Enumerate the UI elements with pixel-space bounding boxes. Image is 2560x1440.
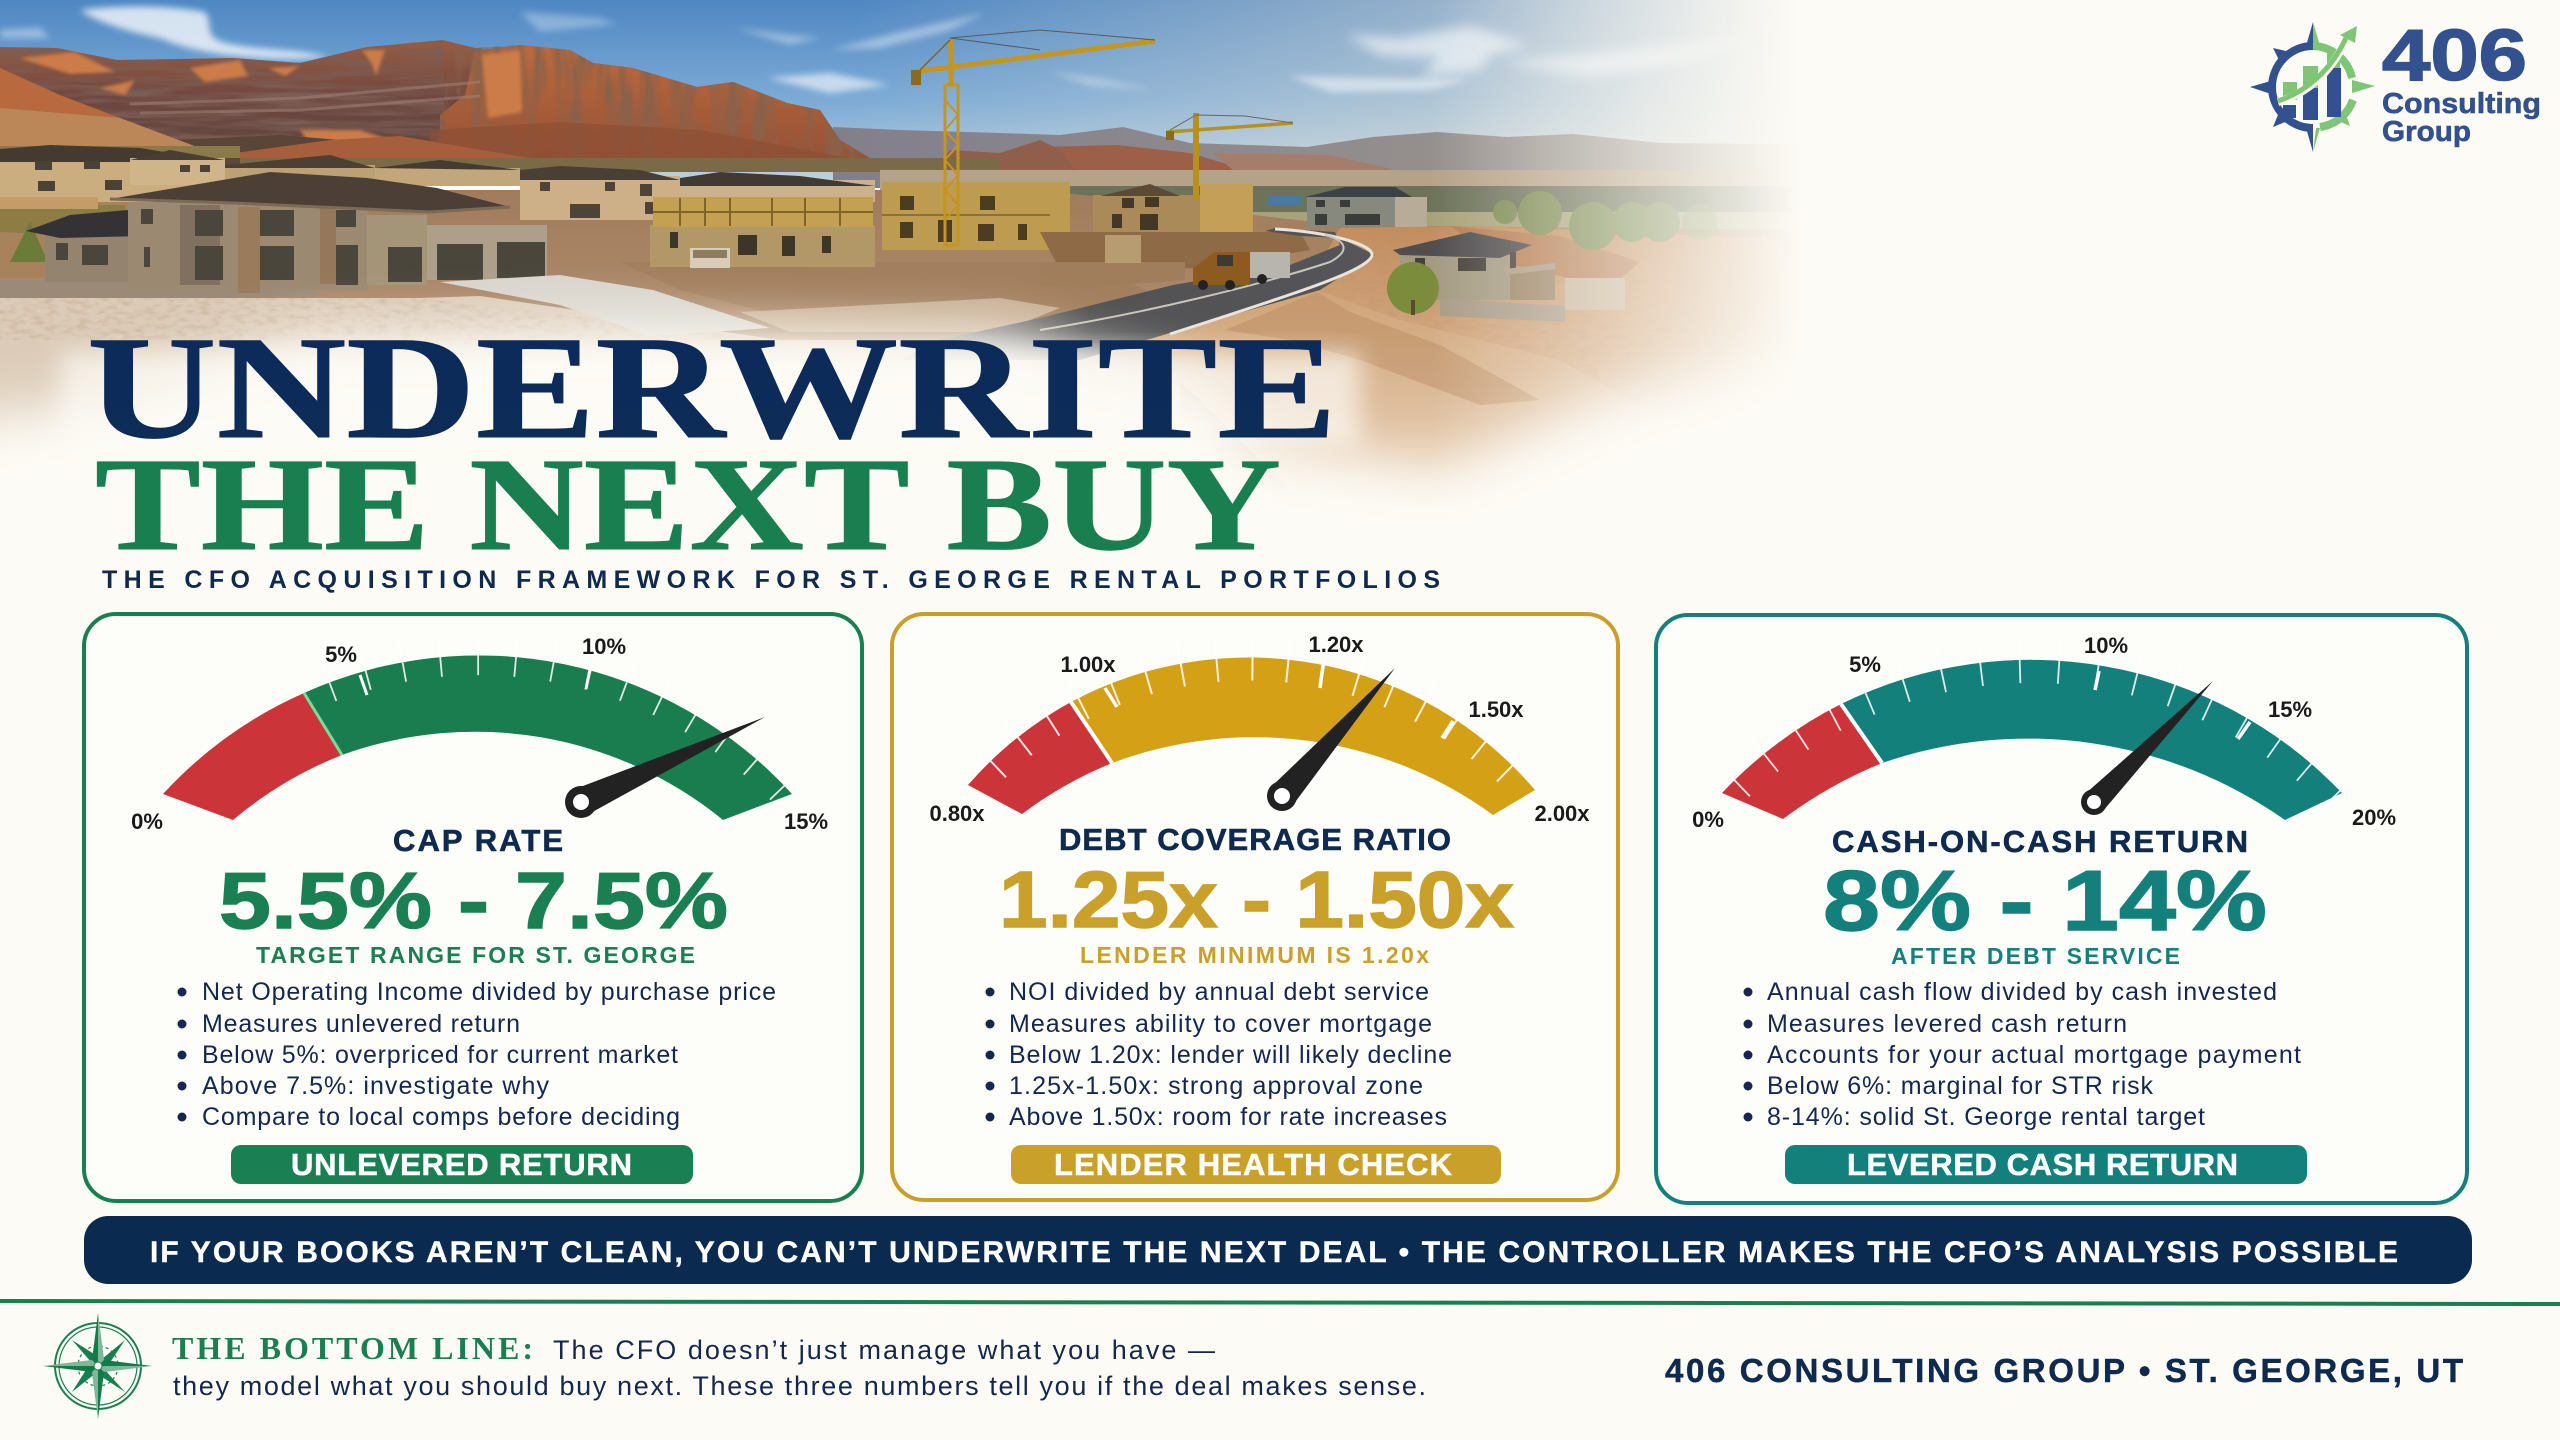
gauge red zone: [968, 702, 1112, 814]
right dirt field: [1318, 226, 1712, 396]
gauge needle: [565, 717, 765, 818]
bullet list: Accounts for your actual mortgage payment: [1767, 1041, 2301, 1069]
gauge: debt coverage: [929, 632, 1590, 826]
scale labels: 0.80x: [929, 801, 985, 826]
bottom line text 1: The CFO doesn’t just manage what you have —: [553, 1335, 1215, 1365]
title line 2: THE NEXT BUY: [95, 430, 1281, 578]
bullet list: [178, 978, 776, 1131]
scale labels: 1.50x: [1468, 697, 1524, 722]
bullet list: 8-14%: solid St. George rental target: [1767, 1103, 2205, 1131]
footer: [43, 1313, 2463, 1419]
scale labels: 10%: [582, 634, 626, 659]
callout banner: IF YOUR BOOKS AREN’T CLEAN, YOU CAN’T UNDERWRITE THE NEXT DEAL • THE CONTROLLER MAKES THE CFO’S ANALYSIS POSSIBLE: [150, 1236, 2398, 1269]
gauge teal zone: [1841, 660, 2342, 820]
bullet list: Below 1.20x: lender will likely decline: [1009, 1041, 1452, 1069]
company and location: 406 CONSULTING GROUP • ST. GEORGE, UT: [1665, 1352, 2463, 1389]
hero photo: desert construction scene: [0, 0, 1781, 494]
distant ranges: [833, 127, 1850, 188]
gauge red zone: [1722, 704, 1882, 819]
scale labels: 5%: [1849, 652, 1881, 677]
bullet list: 1.25x-1.50x: strong approval zone: [1009, 1072, 1423, 1100]
bullet list: Above 1.50x: room for rate increases: [1009, 1103, 1447, 1131]
bottom line label: THE BOTTOM LINE:: [172, 1330, 533, 1366]
gauge gold zone: [1071, 657, 1535, 815]
ground base: [216, 190, 1687, 480]
framed house C: [1093, 184, 1253, 233]
scale labels: 1.20x: [1308, 632, 1364, 657]
back row houses center: [520, 166, 875, 220]
metric name: DEBT COVERAGE RATIO: [1059, 822, 1451, 857]
gauge: cap rate: [131, 634, 828, 834]
panel: cash-on-cash return: [1656, 615, 2467, 1203]
logo: 406 Consulting Group: [2250, 16, 2541, 152]
badge: LENDER HEALTH CHECK: [1054, 1147, 1453, 1182]
tower crane 2: [1167, 113, 1293, 200]
logo text Consulting: Consulting: [2382, 88, 2541, 120]
small tree left: [10, 222, 48, 262]
logo compass icon: [2250, 22, 2375, 152]
scale labels: [929, 632, 1590, 826]
gauge green zone: [304, 655, 792, 820]
crane 1 counterweight: [911, 70, 921, 85]
scale labels: 15%: [2268, 697, 2312, 722]
framed house A: [650, 197, 875, 268]
scale labels: 0%: [1692, 807, 1724, 832]
scale labels: 5%: [325, 642, 357, 667]
metric name: CASH-ON-CASH RETURN: [1832, 824, 2248, 859]
bullet list: Measures unlevered return: [202, 1010, 520, 1038]
scale labels: 1.00x: [1060, 652, 1116, 677]
badge: LEVERED CASH RETURN: [1847, 1147, 2238, 1182]
bullet list: Below 5%: overpriced for current market: [202, 1041, 678, 1069]
title line 1: UNDERWRITE: [87, 306, 1337, 469]
gauge needle: [2081, 681, 2213, 815]
scale labels: 20%: [2352, 805, 2396, 830]
bullet list: Annual cash flow divided by cash invested: [1767, 978, 2277, 1006]
bullet list: Compare to local comps before deciding: [202, 1103, 680, 1131]
badge: [1785, 1145, 2307, 1184]
card frame: [84, 614, 862, 1201]
halo behind title: [60, 352, 1360, 447]
low block walls and dirt: [1040, 232, 1310, 270]
bullet list: Measures ability to cover mortgage: [1009, 1010, 1432, 1038]
construction ground: [646, 274, 1148, 320]
scale labels: 2.00x: [1534, 801, 1590, 826]
bullet list: Net Operating Income divided by purchase price: [202, 978, 776, 1006]
dune: [1140, 295, 1565, 474]
scale labels: 10%: [2084, 633, 2128, 658]
scale labels: [1692, 633, 2396, 832]
bullet list: Below 6%: marginal for STR risk: [1767, 1072, 2154, 1100]
road: [900, 228, 1375, 360]
bullet list: Above 7.5%: investigate why: [202, 1072, 550, 1100]
badge: [231, 1145, 693, 1184]
right house: [1387, 232, 1625, 322]
logo text 406: 406: [2382, 16, 2527, 96]
callout banner: [84, 1216, 2472, 1284]
foreground left hill: [0, 68, 194, 146]
scale labels: 15%: [784, 809, 828, 834]
framed house B: [882, 182, 1070, 250]
main mesa: [0, 40, 870, 165]
bullet list: NOI divided by annual debt service: [1009, 978, 1429, 1006]
crane 2 counterweight: [1166, 131, 1174, 140]
target value: 8% - 14%: [1823, 854, 2267, 949]
scale labels: [131, 634, 828, 834]
target value: 5.5% - 7.5%: [219, 856, 728, 945]
tower crane 1: [912, 30, 1155, 245]
vegetation strip: [0, 146, 240, 158]
target value: 1.25x - 1.50x: [999, 855, 1514, 944]
subtitle: THE CFO ACQUISITION FRAMEWORK FOR ST. GEORGE RENTAL PORTFOLIOS: [102, 566, 1440, 594]
panel: cap rate: [84, 614, 862, 1201]
bullet list: [1744, 978, 2301, 1131]
metric name: CAP RATE: [393, 823, 563, 858]
target caption: LENDER MINIMUM IS 1.20x: [1080, 942, 1429, 968]
bottom line text 2: they model what you should buy next. These three numbers tell you if the deal makes sense.: [173, 1371, 1426, 1401]
gauge needle: [1267, 668, 1395, 811]
bullet list: Measures levered cash return: [1767, 1010, 2127, 1038]
logo text Group: Group: [2382, 116, 2471, 148]
badge: UNLEVERED RETURN: [291, 1147, 632, 1182]
trees on the right: [1493, 191, 1718, 250]
scale labels: 0%: [131, 809, 163, 834]
icon: compass rose: [43, 1313, 152, 1419]
gauge: cash on cash: [1692, 633, 2396, 832]
target caption: TARGET RANGE FOR ST. GEORGE: [256, 942, 695, 968]
card frame: [892, 614, 1618, 1200]
bullet list: [986, 978, 1452, 1131]
target caption: AFTER DEBT SERVICE: [1891, 943, 2180, 969]
main house: [26, 172, 547, 293]
grey house in distance: [1305, 187, 1427, 227]
card frame: [1656, 615, 2467, 1203]
panel: debt coverage ratio: [892, 614, 1618, 1200]
trucks: [1193, 252, 1290, 290]
gauge red zone: [163, 693, 342, 820]
back row houses left: [0, 145, 520, 209]
driveway: [440, 275, 770, 336]
